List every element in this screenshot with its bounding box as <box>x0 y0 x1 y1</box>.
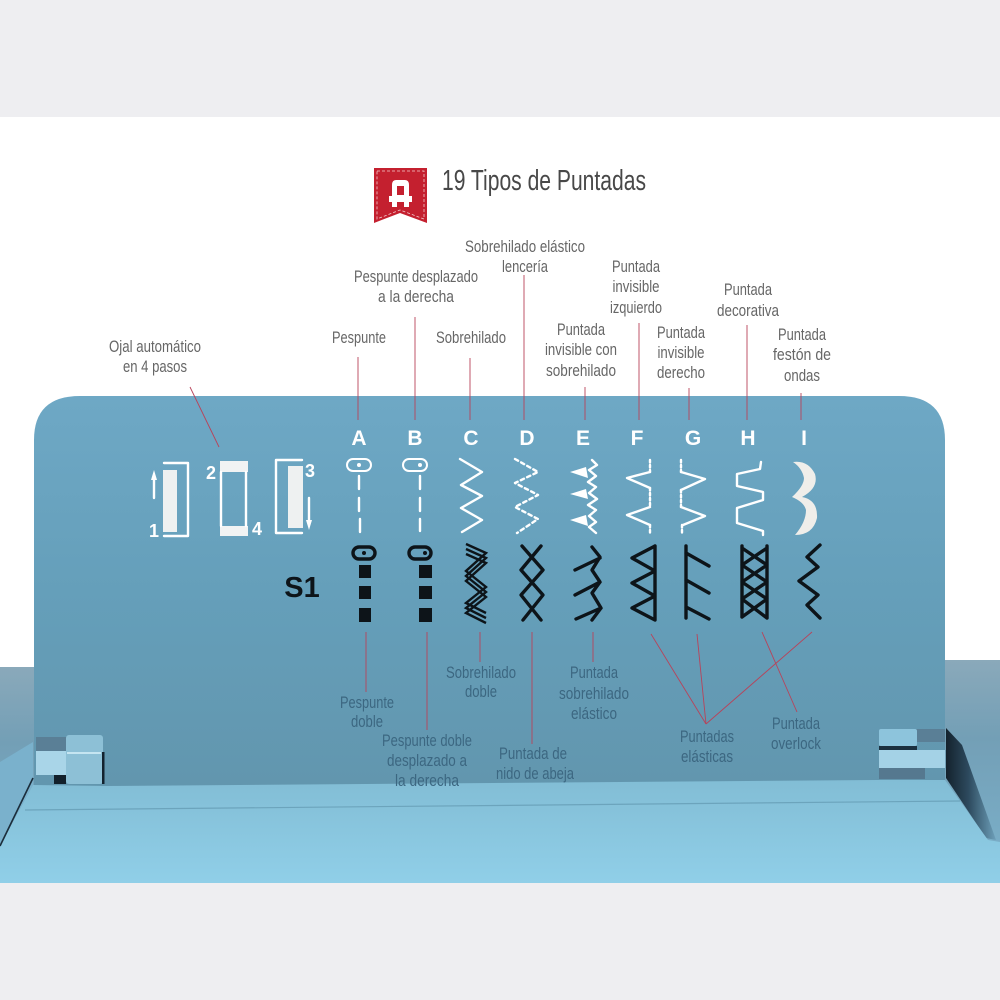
machine right side <box>945 660 1000 883</box>
white stitch H <box>737 462 763 535</box>
white stitch F <box>627 460 650 533</box>
letters A to I: G <box>685 427 701 450</box>
label: Puntada invisible izquierdo: invisible <box>612 277 660 296</box>
label: Puntada sobrehilado elástico: sobrehilado <box>559 684 629 703</box>
label: Puntada overlock: overlock <box>771 734 821 753</box>
label: Puntada decorativa: decorativa <box>717 301 779 320</box>
right hinge <box>879 729 945 779</box>
title: 19 Tipos de Puntadas <box>442 165 646 197</box>
black stitch H <box>742 546 767 618</box>
letters A to I: D <box>519 427 535 450</box>
letters A to I: A <box>351 427 367 450</box>
machine base <box>0 778 1000 883</box>
label: Puntadas elásticas: elásticas <box>681 747 733 766</box>
label: Sobrehilado elástico lencería: lencería <box>502 257 548 276</box>
letters A to I: H <box>740 427 756 450</box>
letters A to I <box>351 427 807 450</box>
label: Pespunte desplazado: a la derecha <box>378 287 454 306</box>
label: Puntada decorativa: Puntada <box>724 280 772 299</box>
white stitch D <box>515 459 538 533</box>
label: Puntada invisible derecho: derecho <box>657 363 705 382</box>
letters A to I: I <box>801 427 807 450</box>
label: Pespunte: Pespunte <box>332 328 386 347</box>
label: Puntada invisible derecho: invisible <box>658 343 704 362</box>
label: Pespunte doble desplazado: Pespunte doble <box>382 731 472 750</box>
letters A to I: C <box>463 427 479 450</box>
label: Sobrehilado doble: Sobrehilado <box>446 663 516 682</box>
letters A to I: E <box>576 427 590 450</box>
title icon: red bookmark with A <box>374 168 427 223</box>
label: Ojal automático: en 4 pasos <box>123 357 187 376</box>
label: Puntada de nido de abeja: nido de abeja <box>496 764 574 783</box>
label: Puntada festón de ondas: Puntada <box>778 325 826 344</box>
icon: four-step buttonhole: 2 <box>206 463 216 483</box>
label: Pespunte doble: doble <box>351 712 383 731</box>
label: Puntada invisible con sobrehilado: invisible con <box>545 340 617 359</box>
top leader lines <box>190 275 801 447</box>
white stitch B <box>403 459 427 531</box>
label: Ojal automático: Ojal automático <box>109 337 201 356</box>
black stitch G <box>686 546 709 619</box>
black stitch A <box>353 547 375 622</box>
label: Puntada overlock: Puntada <box>772 714 820 733</box>
black stitch E <box>575 547 601 620</box>
label: Pespunte doble desplazado: la derecha <box>395 771 459 790</box>
label: Pespunte desplazado: Pespunte desplazado <box>354 267 478 286</box>
letters A to I: F <box>631 427 644 450</box>
white stitch C <box>460 459 482 532</box>
machine left side <box>0 667 36 883</box>
stitch panel <box>34 396 945 786</box>
label: Sobrehilado: Sobrehilado <box>436 328 506 347</box>
label: Sobrehilado elástico lencería: Sobrehilado elástico <box>465 237 585 256</box>
icon: four-step buttonhole: 3 <box>305 461 315 481</box>
label: Puntada invisible izquierdo: Puntada <box>612 257 660 276</box>
label: Puntada festón de ondas: ondas <box>784 366 820 385</box>
label: Puntadas elásticas: Puntadas <box>680 727 734 746</box>
white stitch G <box>681 460 705 533</box>
label: Puntada de nido de abeja: Puntada de <box>499 744 567 763</box>
icon: four-step buttonhole: 4 <box>252 519 262 539</box>
label: Puntada invisible con sobrehilado: sobrehilado <box>546 361 616 380</box>
label: Puntada sobrehilado elástico: elástico <box>571 704 617 723</box>
icon: four-step buttonhole <box>149 460 315 541</box>
white stitch E <box>570 460 597 533</box>
label: Pespunte doble desplazado: desplazado a <box>387 751 467 770</box>
black stitch B <box>409 547 432 622</box>
label: Puntada invisible con sobrehilado: Puntada <box>557 320 605 339</box>
left hinge <box>36 735 104 784</box>
black stitch D <box>521 546 543 620</box>
bottom leader lines <box>366 632 812 744</box>
black stitch I <box>799 545 820 618</box>
label: Puntada sobrehilado elástico: Puntada <box>570 663 618 682</box>
white stitch I <box>792 462 817 535</box>
black stitch F <box>632 546 655 620</box>
label: Puntada invisible derecho: Puntada <box>657 323 705 342</box>
label: Sobrehilado doble: doble <box>465 682 497 701</box>
label: Puntada invisible izquierdo: izquierdo <box>610 298 662 317</box>
S1 label: S1 <box>284 572 320 604</box>
label: Pespunte doble: Pespunte <box>340 693 394 712</box>
black stitch C <box>466 544 486 623</box>
white stitch A <box>347 459 371 532</box>
icon: four-step buttonhole: 1 <box>149 521 159 541</box>
letters A to I: B <box>407 427 423 450</box>
page background top band <box>0 0 1000 117</box>
label: Puntada festón de ondas: festón de <box>773 345 831 364</box>
page background bottom band <box>0 883 1000 1000</box>
